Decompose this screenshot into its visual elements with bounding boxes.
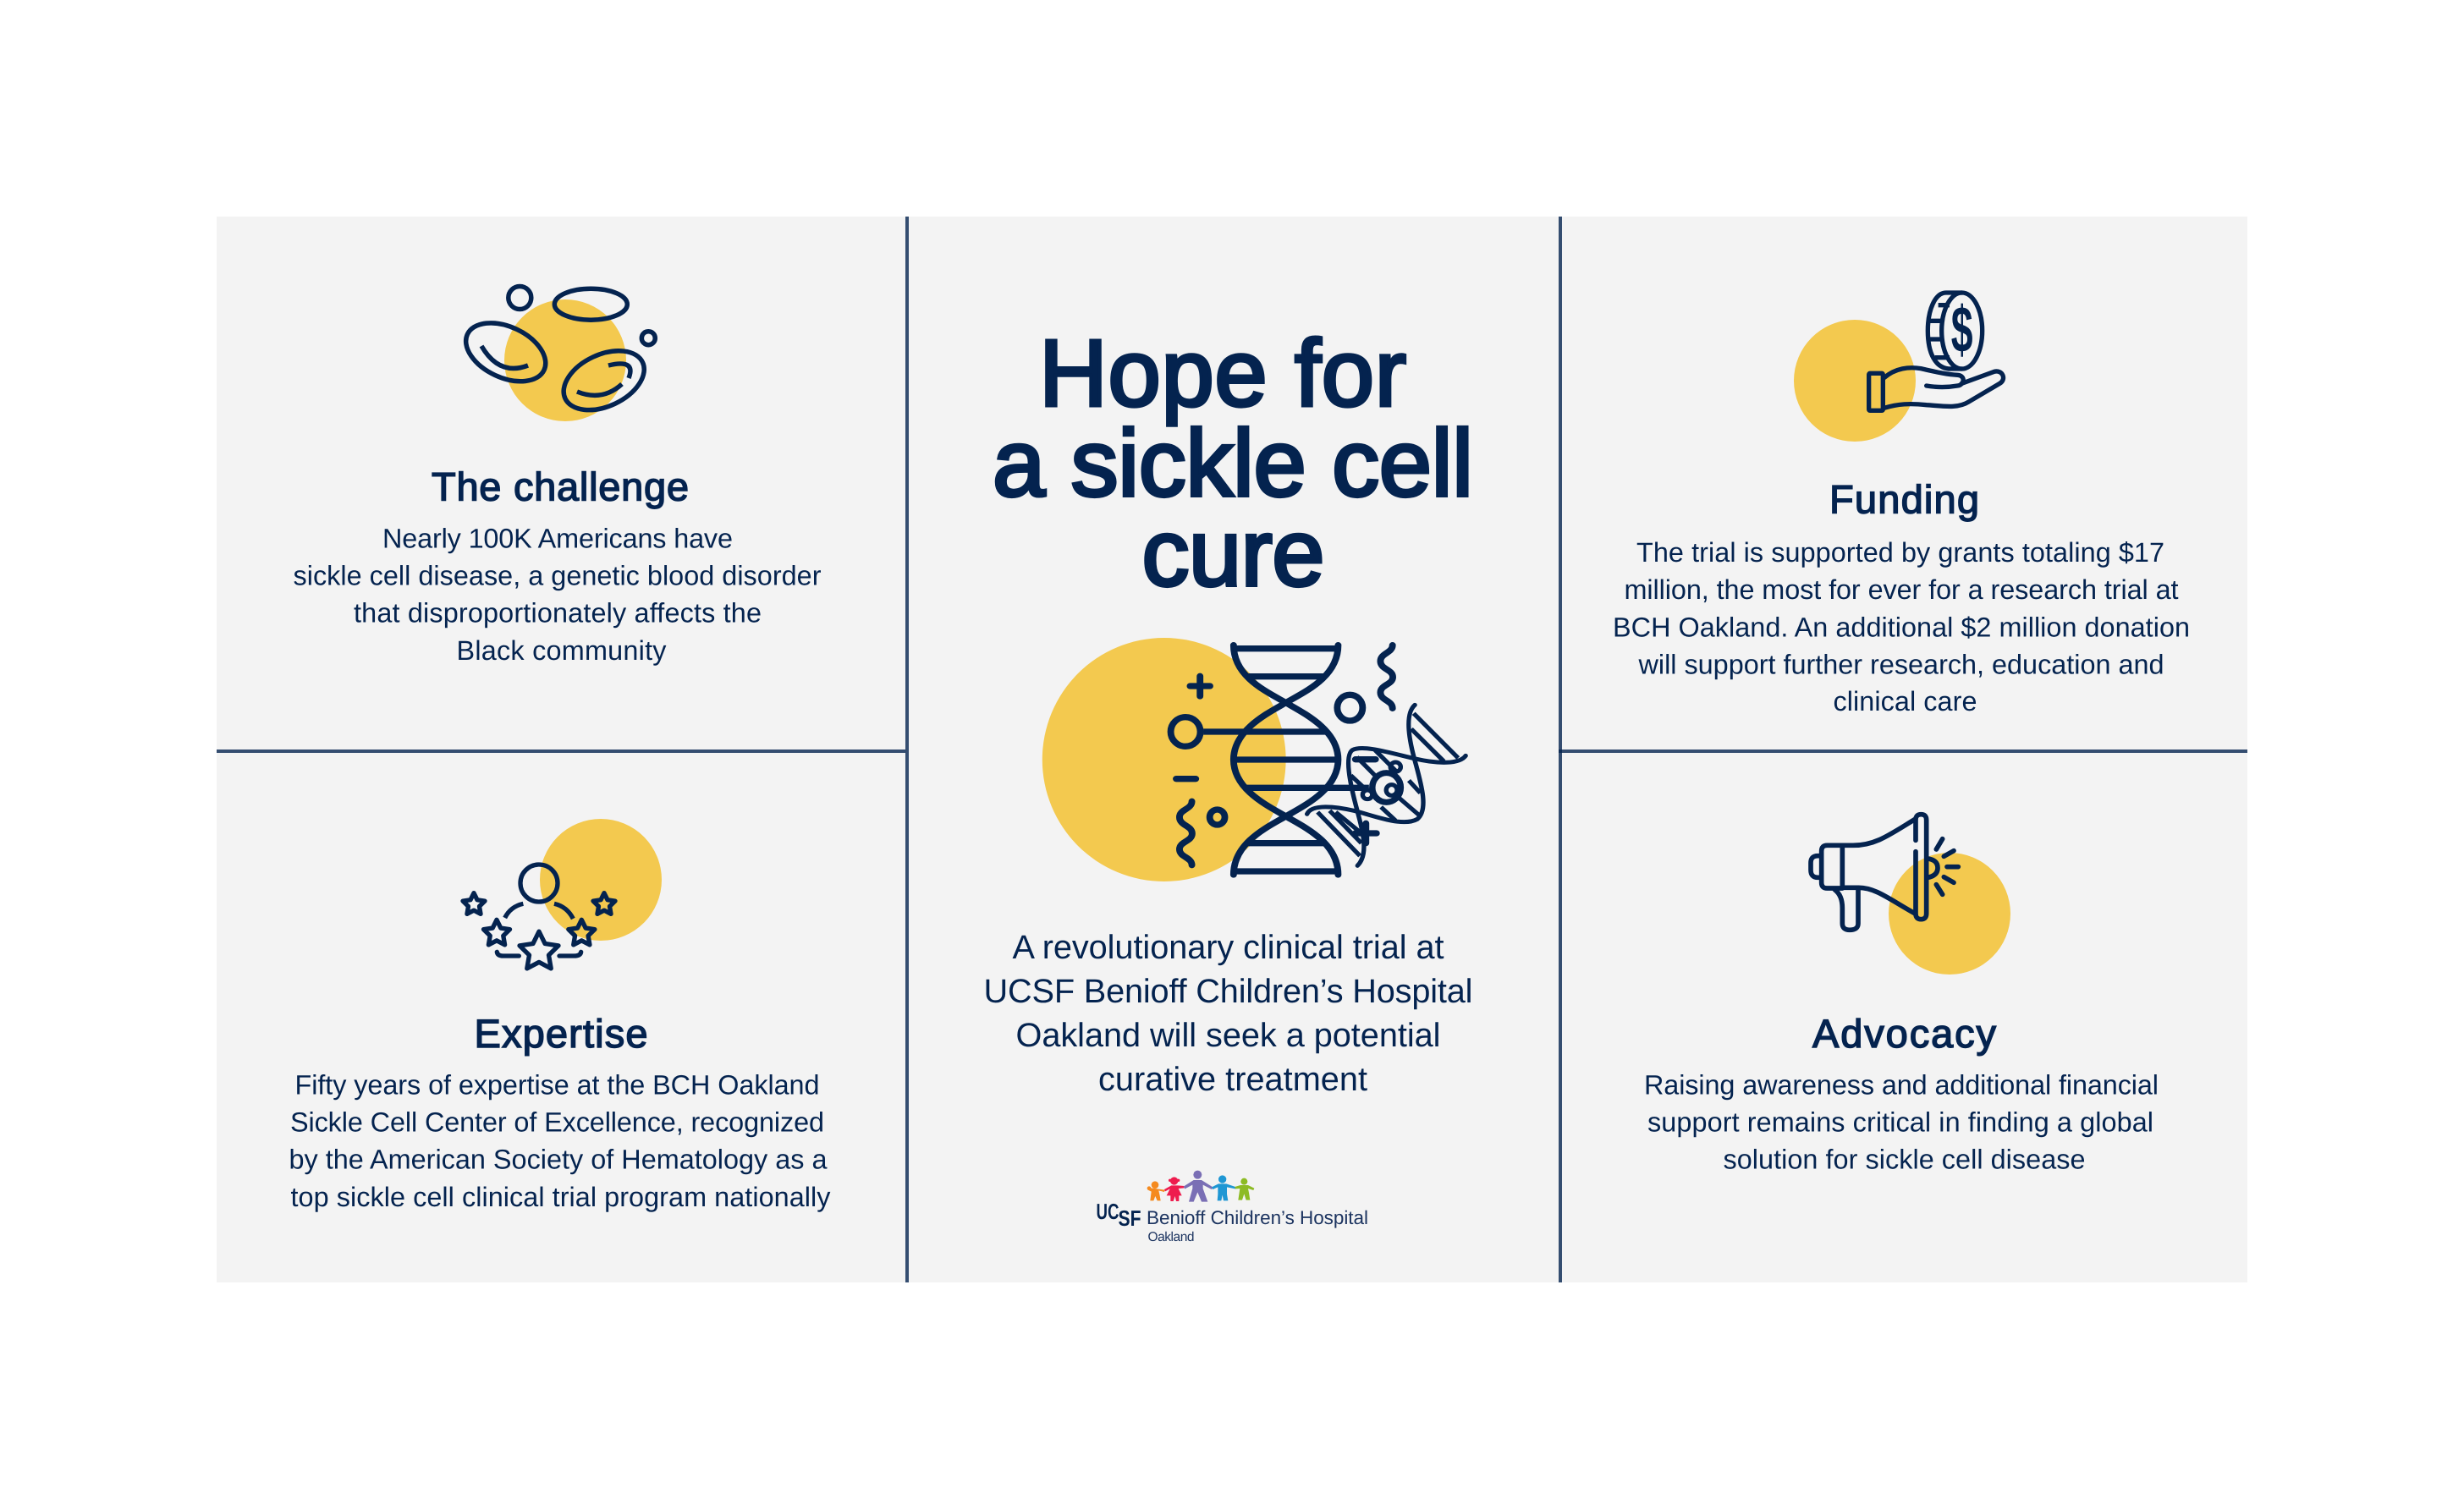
text block: advocacy	[1644, 1069, 2159, 1175]
heading: expertise: Expertise	[474, 1011, 648, 1056]
heading: advocacy: Advocacy	[1812, 1011, 1997, 1056]
text block: intro	[983, 929, 1472, 1098]
heading: funding: Funding	[1829, 477, 1979, 522]
logo: UCSF Benioff Children's Hospital Oakland	[1097, 1171, 1368, 1244]
grid dividers	[217, 217, 2247, 1282]
icon: hand holding coin	[1794, 293, 2004, 442]
text block: expertise: Sickle Cell Center of Excellence, recognized	[290, 1106, 824, 1137]
title: Hope for	[1039, 321, 1406, 426]
panel: funding	[1613, 293, 2190, 717]
icon: megaphone	[1811, 815, 2010, 975]
text block: the challenge: Black community	[457, 635, 667, 666]
panel: expertise	[289, 819, 831, 1212]
text block: the challenge: that disproportionately affects the	[354, 598, 762, 629]
text block: funding: will support further research, education and	[1638, 650, 2164, 680]
text block: funding: clinical care	[1833, 686, 1977, 717]
text block: advocacy: support remains critical in finding a global	[1647, 1106, 2153, 1137]
text block: expertise	[289, 1069, 831, 1212]
panel: advocacy	[1644, 815, 2159, 1175]
logo: UCSF Benioff Children's Hospital Oakland: Benioff Children’s Hospital	[1147, 1207, 1368, 1228]
logo wordmark: UC	[1097, 1199, 1119, 1224]
icon: person with stars	[463, 819, 662, 969]
icon: blood cells	[457, 286, 655, 422]
heading: the challenge: The challenge	[432, 464, 689, 509]
text block: funding: million, the most for ever for a research trial at	[1625, 574, 2178, 605]
title: a sickle cell	[993, 410, 1473, 516]
text block: the challenge: sickle cell disease, a genetic blood disorder	[293, 560, 822, 590]
panel: grey background	[217, 217, 2247, 1282]
text block: intro: UCSF Benioff Children’s Hospital	[983, 973, 1472, 1010]
text block: funding: BCH Oakland. An additional $2 million donation	[1613, 612, 2190, 642]
text block: funding	[1613, 537, 2190, 717]
panel: the challenge	[293, 286, 822, 666]
text block: the challenge: Nearly 100K Americans have	[382, 523, 733, 553]
text block: expertise: top sickle cell clinical trial program nationally	[291, 1182, 831, 1212]
text block: expertise: Fifty years of expertise at the BCH Oakland	[294, 1069, 819, 1100]
icon: paper-doll family	[1147, 1171, 1254, 1202]
text block: advocacy: solution for sickle cell disease	[1723, 1145, 2085, 1175]
text block: advocacy: Raising awareness and additional financial	[1644, 1069, 2159, 1100]
text block: funding: The trial is supported by grants totaling $17	[1636, 537, 2164, 568]
title: cure	[1142, 500, 1325, 606]
text block: intro: curative treatment	[1098, 1061, 1367, 1098]
logo: UCSF Benioff Children's Hospital Oakland: Oakland	[1147, 1230, 1195, 1244]
text block: intro: A revolutionary clinical trial at	[1012, 929, 1444, 966]
text block: expertise: by the American Society of Hematology as a	[289, 1145, 828, 1175]
text block: the challenge	[293, 523, 822, 666]
text block: intro: Oakland will seek a potential	[1015, 1017, 1440, 1054]
panel: centre	[983, 321, 1473, 1244]
icon glyph: dollar sign: $	[1951, 293, 1973, 366]
title	[993, 321, 1473, 606]
icon: DNA helix	[1042, 638, 1466, 881]
logo: UCSF Benioff Children's Hospital Oakland: SF	[1119, 1205, 1141, 1231]
